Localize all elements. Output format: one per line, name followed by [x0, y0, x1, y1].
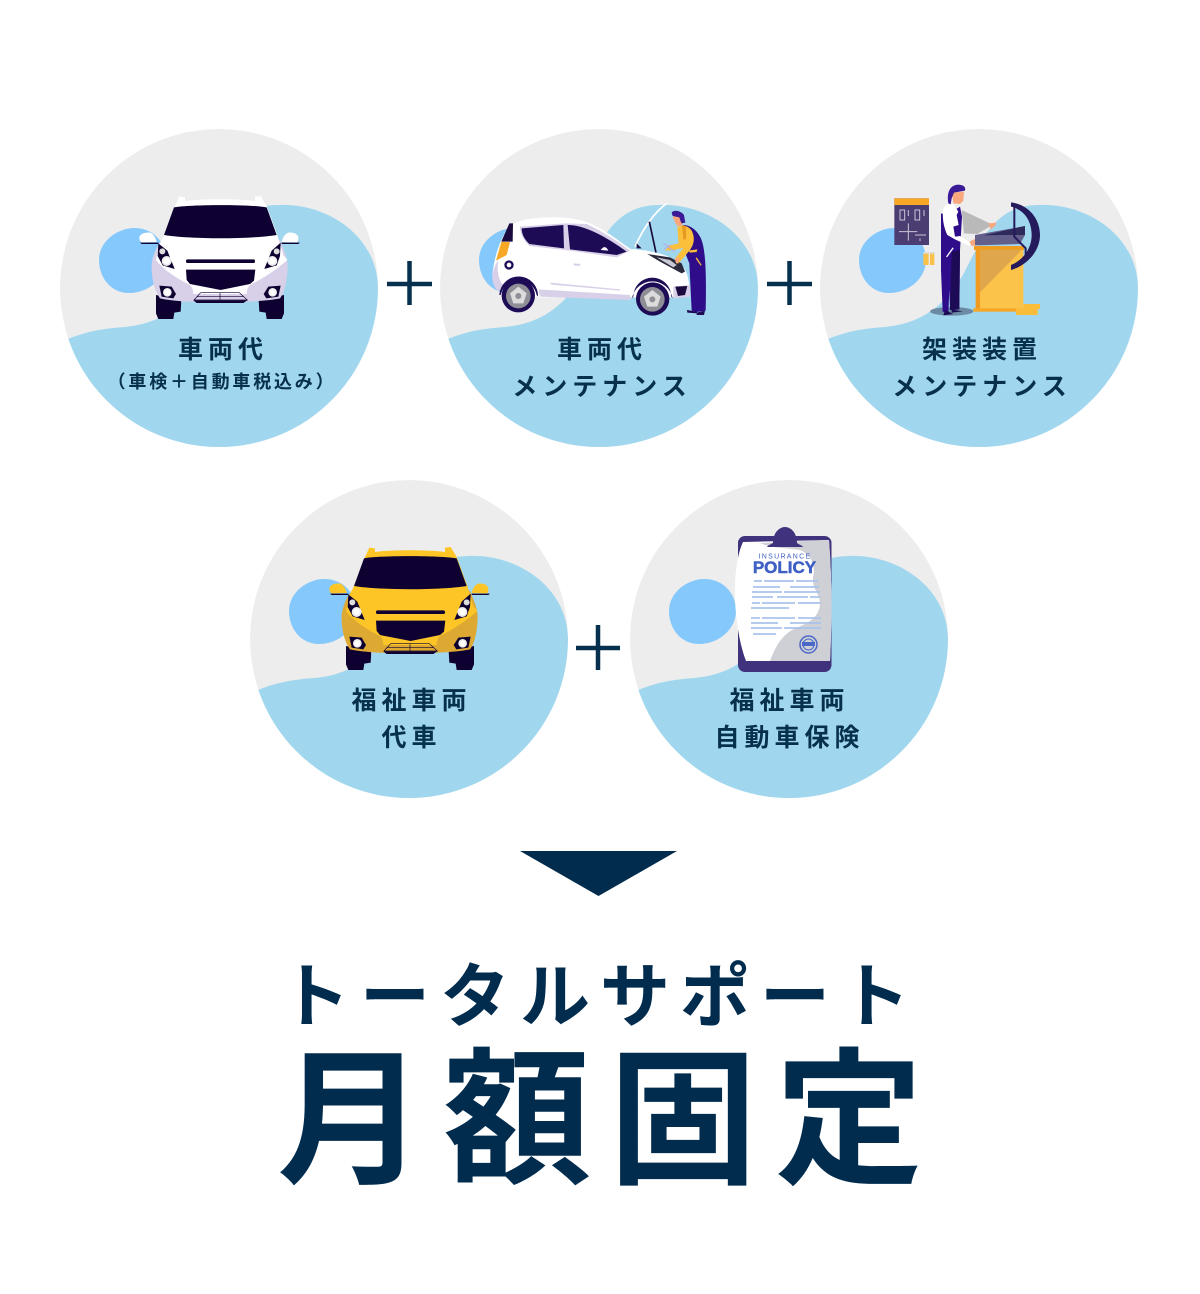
icon: car with mechanic	[492, 203, 706, 316]
policy heading: POLICY	[753, 558, 817, 577]
plus sign 3	[576, 625, 620, 670]
icon: yellow car front	[329, 547, 490, 670]
label: welfare vehicle: 福祉車両	[351, 687, 472, 715]
label: vehicle cost note: （車検＋自動車税込み）	[108, 372, 336, 392]
plus sign 2	[767, 261, 812, 305]
circle background: vehicle cost	[49, 129, 389, 458]
label: vehicle cost: 車両代	[178, 336, 268, 364]
circle background: vehicle insurance	[619, 480, 959, 809]
arrow: down triangle	[520, 851, 677, 896]
panel: vehicle insurance	[619, 480, 959, 809]
panel: vehicle cost	[49, 129, 389, 458]
label: welfare vehicle: 福祉車両	[729, 687, 850, 715]
label: equipment line 2: メンテナンス	[892, 373, 1072, 401]
circle background: equipment maintenance	[809, 129, 1149, 458]
label: maintenance line 2: メンテナンス	[512, 373, 692, 401]
heading: total support: トータルサポート	[280, 958, 920, 1036]
plus sign 1	[387, 261, 432, 305]
policy heading small: INSURANCE	[759, 554, 811, 560]
heading: fixed monthly fee: 月額固定	[277, 1039, 941, 1204]
label: auto insurance: 自動車保険	[714, 724, 865, 752]
panel: courtesy car	[239, 480, 579, 809]
label: equipment: 架装装置	[922, 336, 1042, 364]
label: courtesy car: 代車	[381, 724, 442, 752]
icon: insurance policy clipboard	[735, 527, 832, 672]
icon: white car front	[139, 196, 300, 319]
circle background: vehicle maintenance	[429, 129, 769, 458]
panel: vehicle maintenance	[429, 129, 769, 458]
circle background: courtesy car	[239, 480, 579, 809]
icon: technician at equipment	[894, 185, 1040, 316]
panel: equipment maintenance	[809, 129, 1149, 458]
label: vehicle maintenance: 車両代	[557, 336, 647, 364]
